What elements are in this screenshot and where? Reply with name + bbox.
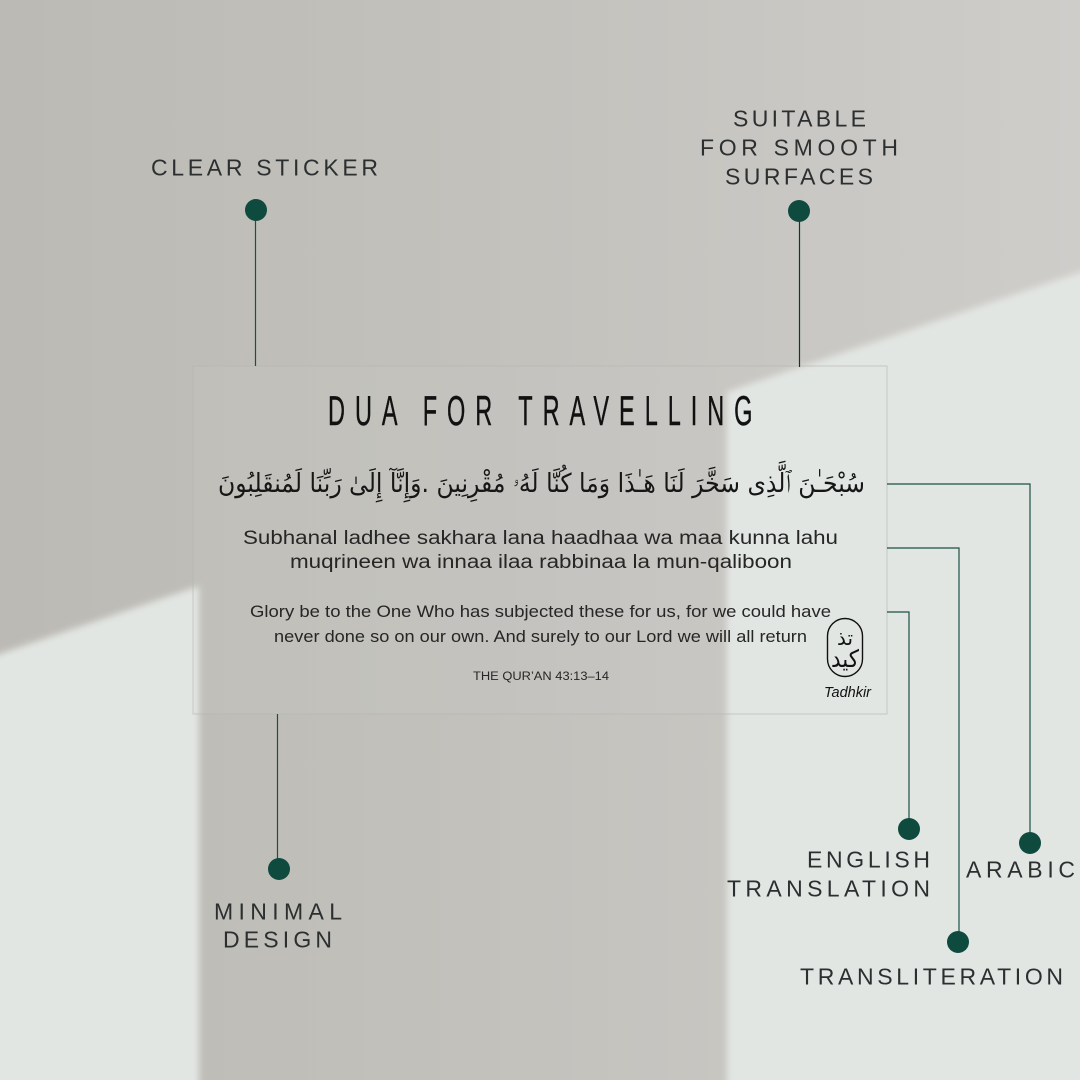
callout: english translation bbox=[727, 612, 930, 902]
callout: transliteration: TRANSLITERATION bbox=[800, 964, 1063, 990]
icon: tadhkir logo: Tadhkir bbox=[824, 684, 872, 701]
callout: suitable for smooth surfaces: SURFACES bbox=[725, 164, 873, 190]
text: source reference: THE QUR’AN 43:13–14 bbox=[473, 671, 610, 683]
callout: suitable for smooth surfaces: FOR SMOOTH bbox=[700, 134, 898, 160]
callout: clear sticker bbox=[151, 154, 378, 366]
text: transliteration: Subhanal ladhee sakhara lana haadhaa wa maa kunna lahu bbox=[243, 528, 838, 549]
icon: tadhkir logo bbox=[824, 618, 872, 701]
callout: suitable for smooth surfaces: SUITABLE bbox=[733, 106, 866, 132]
callout: clear sticker: CLEAR STICKER bbox=[151, 154, 378, 180]
title: DUA FOR TRAVELLING bbox=[328, 388, 752, 435]
callout: suitable for smooth surfaces bbox=[700, 106, 898, 367]
text: transliteration bbox=[243, 528, 838, 573]
callout: minimal design: DESIGN bbox=[223, 926, 332, 952]
text: transliteration: muqrineen wa innaa ilaa rabbinaa la mun-qaliboon bbox=[290, 552, 792, 573]
callout: minimal design: MINIMAL bbox=[214, 898, 342, 924]
callout: minimal design bbox=[214, 714, 342, 952]
icon: tadhkir logo: كيد bbox=[831, 645, 860, 673]
panel: clear sticker card bbox=[193, 366, 887, 714]
callout: arabic bbox=[887, 484, 1075, 882]
text: english translation: never done so on our own. And surely to our Lord we will all return bbox=[274, 628, 807, 646]
text: arabic verse: سُبْحَـٰنَ ٱلَّذِى سَخَّرَ لَنَا هَـٰذَا وَمَا كُنَّا لَهُۥ مُقْرِنِينَ .وَإِنَّآ إِلَىٰ رَبِّنَا لَمُنقَلِبُونَ bbox=[218, 459, 865, 503]
icon: tadhkir logo: تذ bbox=[837, 626, 853, 650]
text: english translation: Glory be to the One Who has subjected these for us, for we could have bbox=[250, 603, 831, 621]
callout: arabic: ARABIC bbox=[966, 856, 1075, 882]
callout: transliteration bbox=[800, 548, 1063, 990]
text: english translation bbox=[250, 603, 831, 646]
callout: english translation: ENGLISH bbox=[807, 846, 930, 872]
callout: english translation: TRANSLATION bbox=[727, 876, 930, 902]
